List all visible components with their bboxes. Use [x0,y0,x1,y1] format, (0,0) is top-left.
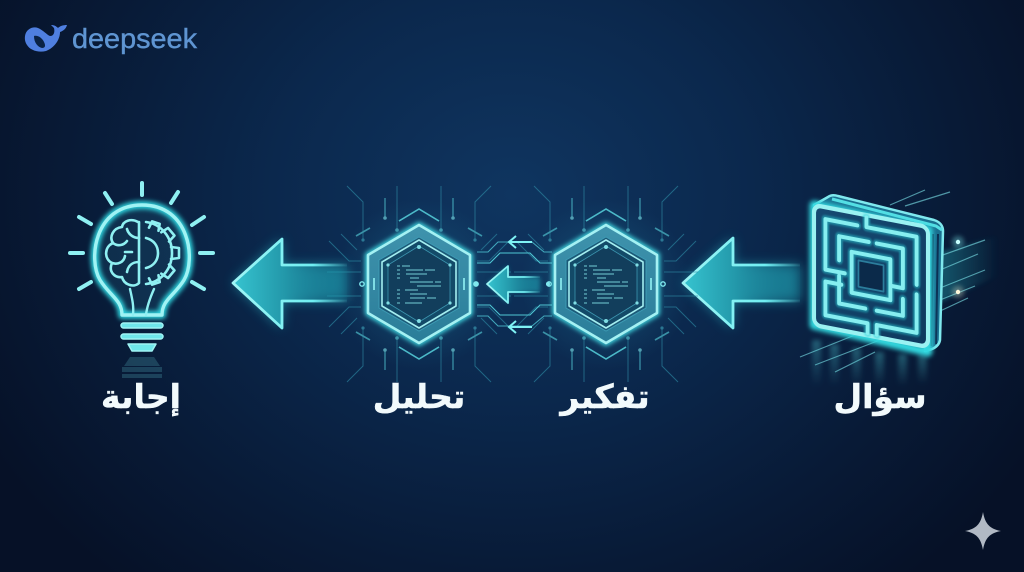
small arrow: top [509,236,532,248]
step: question maze [800,190,998,386]
speed streaks [800,190,998,372]
icon: light bulb with brain and gear [70,183,213,378]
small arrow: bottom [509,321,532,333]
maze side [814,195,943,351]
brain [106,220,139,285]
bulb glow [95,205,189,315]
bulb outline [95,205,189,315]
icon: whale [25,25,67,52]
icon: sparkle watermark [965,512,1001,550]
arrow: analysis to answer [233,239,347,328]
maze front face [814,205,928,347]
gear [146,221,179,285]
arrow: question to thinking [683,238,800,328]
base reflection [122,357,162,378]
label: thinking: تفكير [558,377,650,417]
panel: thinking hexagon [514,186,698,382]
label: question: سؤال [833,377,927,417]
arrow: thinking to analysis [487,266,540,303]
connectors between hexagons [474,242,552,326]
rays [70,183,213,289]
logo: deepseek [25,23,197,54]
maze front glow [814,205,928,352]
panel: analysis hexagon [327,186,511,382]
logo wordmark: deepseek [72,23,197,54]
label: answer: إجابة [101,377,181,417]
bulb filament [130,289,154,315]
label: analysis: تحليل [373,377,465,416]
maze reflection [812,340,927,386]
bulb base [121,323,163,351]
